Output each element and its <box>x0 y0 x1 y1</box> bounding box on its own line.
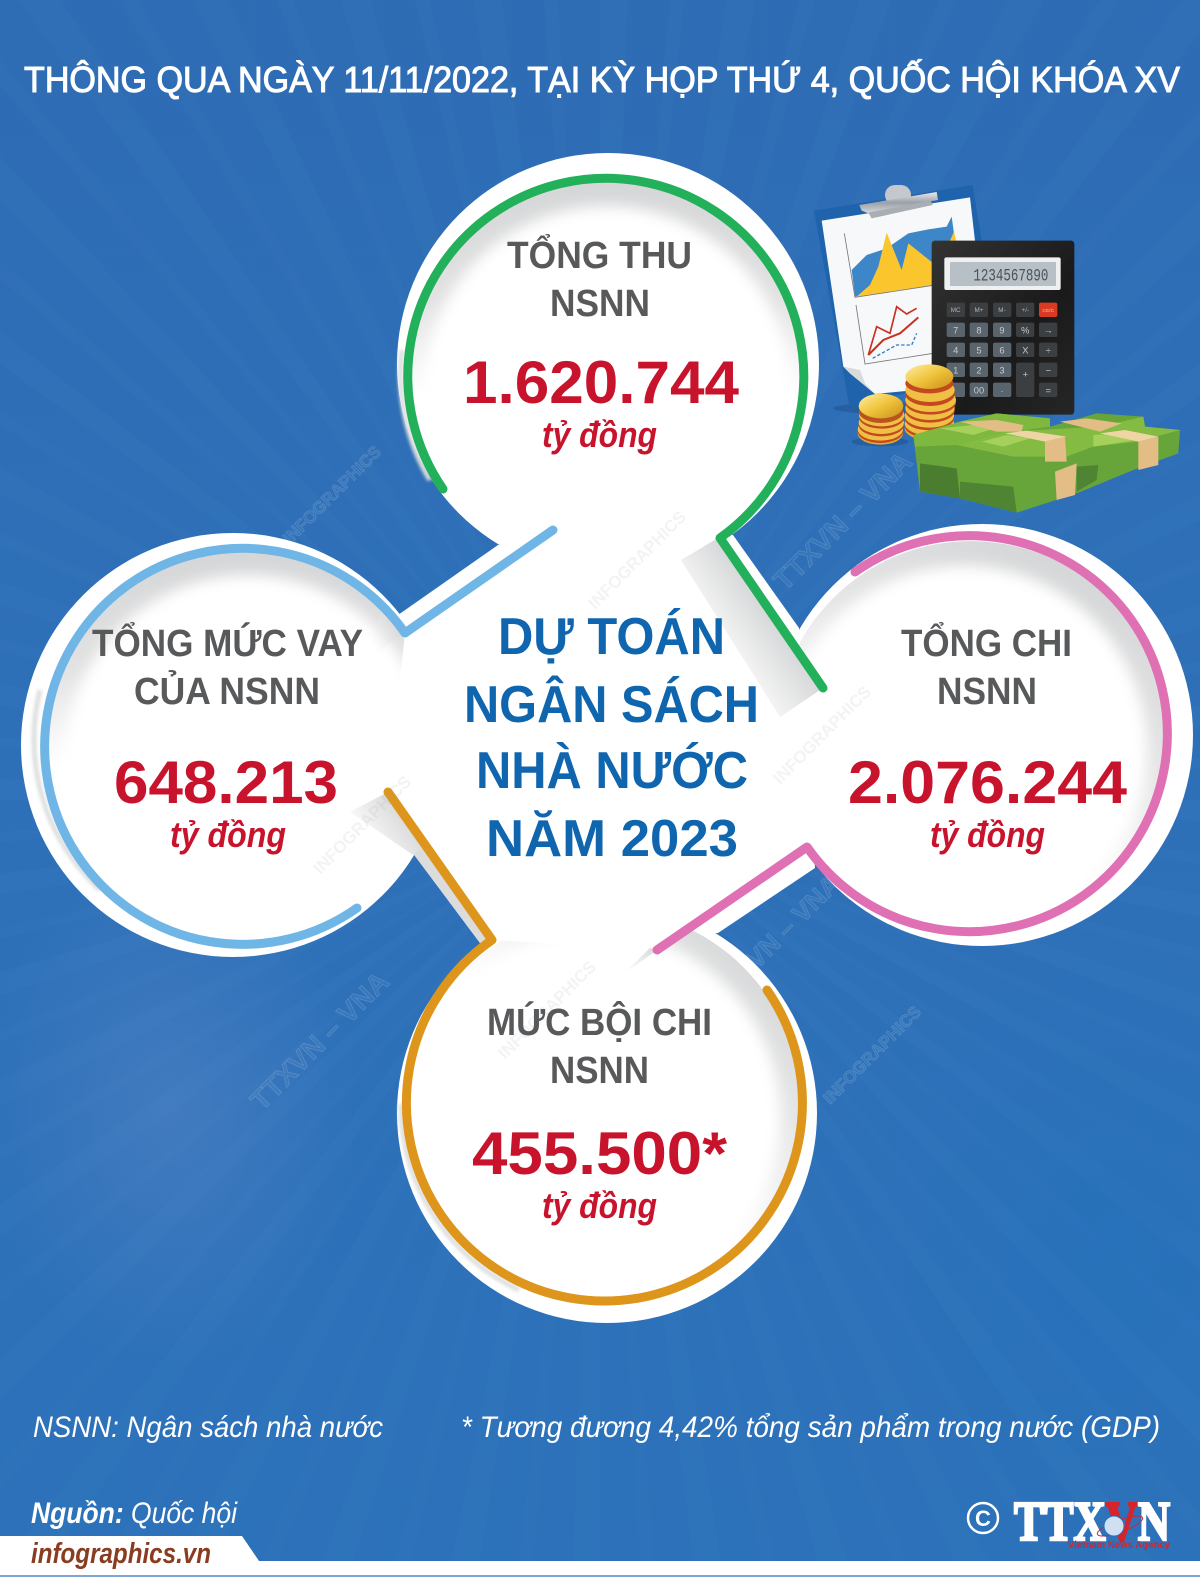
ring: pink (Tổng chi) <box>657 536 1167 950</box>
panel: tổng mức vay: 648.213 <box>114 749 338 816</box>
panel: mức bội chi: NSNN <box>550 1050 649 1092</box>
icon: calculator: CE/C <box>1042 308 1055 314</box>
central heading: NHÀ NƯỚC <box>476 742 748 800</box>
faint watermarks on white <box>309 507 875 1063</box>
watermarks on blue background <box>244 442 925 1116</box>
panel: tổng chi: 2.076.244 <box>848 749 1128 816</box>
icon: calculator: X <box>1022 345 1029 355</box>
panel: tổng thu: TỔNG THU <box>507 232 692 277</box>
panel: mức bội chi: 455.500* <box>472 1120 728 1187</box>
footnote: abbreviation: NSNN: Ngân sách nhà nước <box>33 1411 383 1444</box>
icon: calculator: 3 <box>999 365 1005 375</box>
icon: calculator: − <box>1046 365 1051 375</box>
ring: gold (Mức bội chi) <box>388 792 802 1301</box>
icon: calculator: M+ <box>975 307 984 314</box>
panel: tổng chi: tỷ đồng <box>930 814 1045 855</box>
illustration: clipboard, calculator, coins and cash <box>814 185 1180 513</box>
panel: tổng chi: TỔNG CHI <box>901 620 1072 665</box>
panel: mức bội chi <box>472 999 728 1226</box>
icon: calculator: . <box>1001 384 1003 394</box>
website: infographics.vn <box>31 1538 211 1570</box>
icon: calculator: 9 <box>999 325 1005 335</box>
gray band beside gold connector <box>412 846 492 943</box>
footnote: GDP note: * Tương đương 4,42% tổng sản phẩm trong nước (GDP) <box>461 1411 1160 1444</box>
source: Nguồn: Quốc hội <box>31 1497 238 1530</box>
faint watermarks on white: INFOGRAPHICS <box>769 682 875 788</box>
inner shadow: bottom circle <box>493 931 798 1212</box>
white centre cross covering shadow edges <box>388 530 823 950</box>
icon: stacks of cash <box>913 413 1180 513</box>
icon: calculator: 2 <box>976 365 982 375</box>
icon: calculator: M- <box>998 307 1006 314</box>
icon: calculator: +/- <box>1022 307 1029 314</box>
ring: light blue (Tổng mức vay) <box>45 530 553 944</box>
icon: calculator: 00 <box>974 385 984 395</box>
panel: tổng thu <box>463 232 740 455</box>
icon: calculator: 5 <box>976 345 982 355</box>
icon: calculator: 1234567890 <box>973 268 1048 287</box>
faint watermarks on white: INFOGRAPHICS <box>494 957 600 1063</box>
watermarks on blue background: INFOGRAPHICS <box>819 1002 925 1108</box>
icon: calculator: + <box>1023 369 1028 379</box>
icon: calculator: ÷ <box>1046 345 1051 355</box>
watermarks on blue background: TTXVN – VNA <box>244 966 395 1116</box>
watermarks on blue background: TTXVN – VNA <box>767 446 918 596</box>
inner shadow: right circle <box>799 541 1163 852</box>
watermarks on blue background: TTXVN – VNA <box>705 868 846 1009</box>
ring: green (Tổng thu) <box>408 178 823 688</box>
icon: calculator: 7 <box>953 325 958 335</box>
panel: tổng chi <box>848 620 1128 855</box>
panel: tổng mức vay <box>92 620 363 855</box>
icon: calculator: 6 <box>999 345 1005 355</box>
icon: calculator: = <box>1046 385 1051 395</box>
watermarks on blue background: INFOGRAPHICS <box>279 442 385 548</box>
footer strip <box>0 1536 1200 1577</box>
icon: calculator: 1 <box>953 365 958 375</box>
panel: tổng thu: 1.620.744 <box>463 349 740 416</box>
icon: calculator: → <box>1044 325 1053 335</box>
central heading <box>464 608 759 868</box>
icon: calculator: 8 <box>976 325 982 335</box>
connector shadows <box>350 538 823 975</box>
central heading: NĂM 2023 <box>486 810 738 868</box>
white cross-shaped base <box>21 153 1193 1323</box>
logo: TTXVN: TTXVN <box>1014 1491 1170 1553</box>
faint watermarks on white: INFOGRAPHICS <box>584 507 690 613</box>
central heading: NGÂN SÁCH <box>464 675 759 734</box>
panel: tổng chi: NSNN <box>937 671 1037 713</box>
panel: tổng mức vay: TỔNG MỨC VAY <box>92 620 363 665</box>
icon: calculator: % <box>1021 325 1029 335</box>
panel: tổng thu: NSNN <box>550 283 650 325</box>
inner shadow: left circle <box>50 552 404 738</box>
central heading: DỰ TOÁN <box>498 608 725 666</box>
panel: mức bội chi: tỷ đồng <box>542 1185 657 1226</box>
outer soft shadows between ring and white rim <box>34 350 519 1290</box>
logo: TTXVN: C <box>975 1506 991 1531</box>
panel: tổng mức vay: tỷ đồng <box>170 814 286 855</box>
icon: calculator: 4 <box>953 345 958 355</box>
icon: clipboard <box>814 185 983 414</box>
panel: mức bội chi: MỨC BỘI CHI <box>487 999 712 1044</box>
logo: TTXVN: Vietnam News Agency <box>1068 1540 1170 1551</box>
icon: gold coins <box>852 364 956 446</box>
panel: tổng mức vay: CỦA NSNN <box>134 669 320 713</box>
faint watermarks on white: INFOGRAPHICS <box>309 772 415 878</box>
panel: tổng thu: tỷ đồng <box>542 414 657 455</box>
icon: calculator: MC <box>951 307 961 314</box>
inner shadow: top circle <box>412 182 798 368</box>
icon: calculator <box>932 241 1074 415</box>
